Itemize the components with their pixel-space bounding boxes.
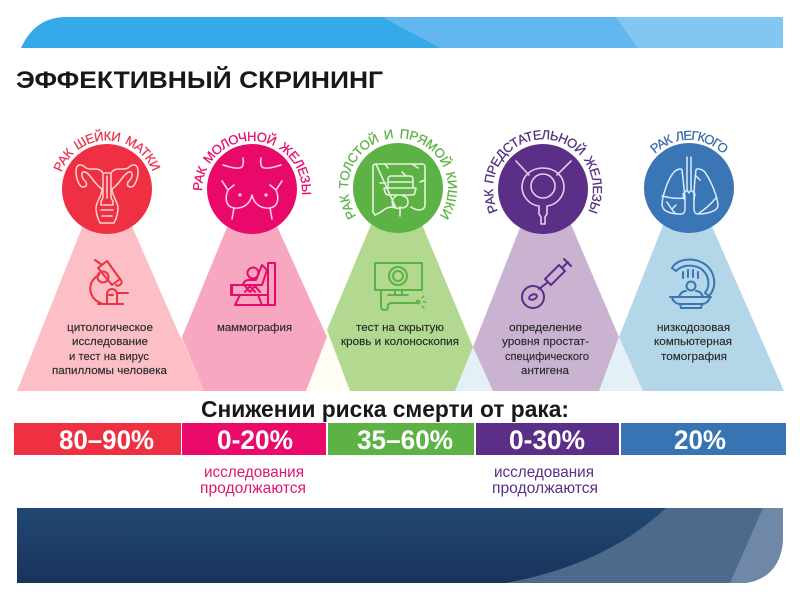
icon: breasts <box>222 158 282 219</box>
test text: низкодозовая <box>657 322 730 334</box>
test text <box>52 322 168 377</box>
test text: цитологическое <box>67 322 153 334</box>
test text <box>341 322 459 348</box>
test text <box>502 322 589 377</box>
icon: colon <box>373 164 425 216</box>
icon: prostate <box>516 161 571 224</box>
stat bar: 35-60% <box>328 423 474 455</box>
note: breast research ongoing <box>200 464 306 497</box>
test text: и тест на вирус <box>69 351 150 363</box>
heading: risk reduction: Снижении риска смерти от рака: <box>201 396 569 422</box>
icon: mammography <box>231 263 275 305</box>
panel: cervical cancer <box>17 128 204 391</box>
panel: prostate cancer <box>473 130 619 391</box>
icon: syringe <box>522 259 571 308</box>
panel: colorectal cancer <box>327 129 473 391</box>
note: prostate research ongoing: продолжаются <box>492 480 598 497</box>
icon: microscope <box>90 260 128 304</box>
label: colorectal cancer: РАК ТОЛСТОЙ И ПРЯМОЙ КИШКИ <box>338 129 458 220</box>
stat bar: 0-20%: 0-20% <box>217 425 293 455</box>
bottom banner <box>17 508 783 583</box>
icon: monitor <box>375 263 426 310</box>
test text: антигена <box>521 365 570 377</box>
test text: папилломы человека <box>52 365 168 377</box>
label: cervical cancer: РАК ШЕЙКИ МАТКИ <box>53 128 160 172</box>
test text: тест на скрытую <box>356 322 444 334</box>
stat bar: 0-30%: 0-30% <box>509 425 585 455</box>
stat bar: 80-90%: 80–90% <box>59 425 154 455</box>
note: prostate research ongoing: исследования <box>494 464 594 481</box>
stat bar: 0-20% <box>182 423 326 455</box>
test text: маммография <box>217 322 292 334</box>
stat bar: 0-30% <box>476 423 619 455</box>
label: lung cancer: РАК ЛЕГКОГО <box>650 130 728 154</box>
panel: breast cancer <box>182 132 327 391</box>
stat bar: 20% <box>621 423 786 455</box>
icon: uterus <box>76 165 138 223</box>
panel: lung cancer <box>619 130 784 391</box>
test text: определение <box>509 322 582 334</box>
note: breast research ongoing: продолжаются <box>200 480 306 497</box>
stat bar: 35-60%: 35–60% <box>357 425 453 455</box>
note: breast research ongoing: исследования <box>204 464 304 481</box>
stat bar: 80-90% <box>14 423 181 455</box>
stat bar: 20%: 20% <box>674 425 726 455</box>
label: prostate cancer: РАК ПРЕДСТАТЕЛЬНОЙ ЖЕЛЕЗЫ <box>484 130 602 214</box>
overlap triangles <box>163 330 643 391</box>
icon: CT scanner <box>670 260 714 308</box>
label: breast cancer: РАК МОЛОЧНОЙ ЖЕЛЕЗЫ <box>192 132 312 194</box>
note: prostate research ongoing <box>492 464 598 497</box>
test text: уровня простат- <box>502 336 589 348</box>
test text <box>654 322 732 363</box>
title: ЭФФЕКТИВНЫЙ СКРИНИНГ <box>16 66 383 94</box>
test text: кровь и колоноскопия <box>341 336 459 348</box>
icon: lungs <box>662 157 718 214</box>
test text: томография <box>661 351 727 363</box>
test text: исследование <box>72 336 148 348</box>
test text: компьютерная <box>654 336 732 348</box>
top banner <box>21 17 783 48</box>
test text: специфического <box>505 351 589 363</box>
